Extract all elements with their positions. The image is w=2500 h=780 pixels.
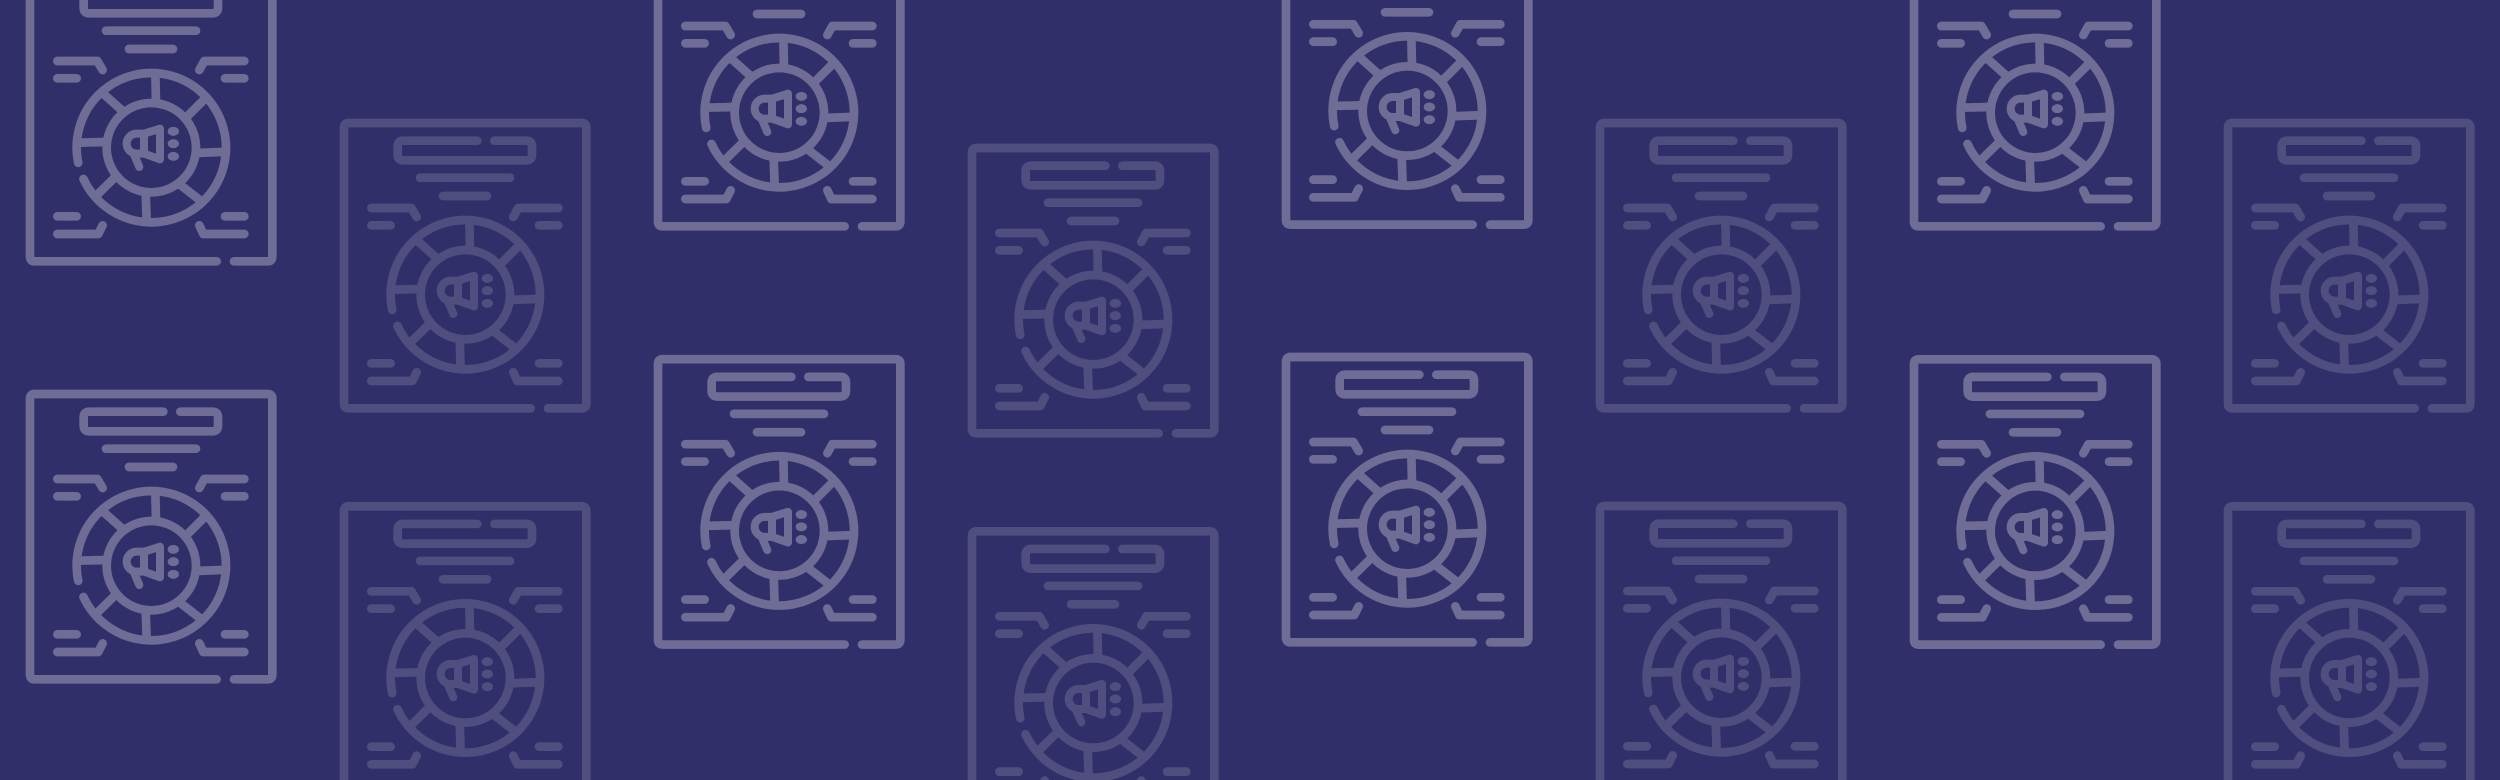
icon: document column 8 bottom — [2228, 506, 2470, 780]
icon: document column 5 top — [1286, 0, 1528, 225]
icon: document column 6 top — [1600, 123, 1842, 408]
icon: document column 6 bottom — [1600, 506, 1842, 780]
icon: document column 5 bottom — [1286, 357, 1528, 642]
icon: document column 3 bottom — [658, 359, 900, 645]
icon: document column 2 top — [344, 123, 586, 408]
icon: document column 7 bottom — [1914, 359, 2156, 645]
icon: document column 4 bottom — [972, 531, 1214, 780]
icon: document column 4 top — [972, 148, 1214, 433]
icon: document column 3 top — [658, 0, 900, 226]
icon: document column 7 top — [1914, 0, 2156, 226]
icon: document column 8 top — [2228, 123, 2470, 408]
icon: document column 1 bottom — [30, 394, 272, 679]
icon: document column 1 top — [30, 0, 272, 261]
icon: document column 2 bottom — [344, 506, 586, 780]
